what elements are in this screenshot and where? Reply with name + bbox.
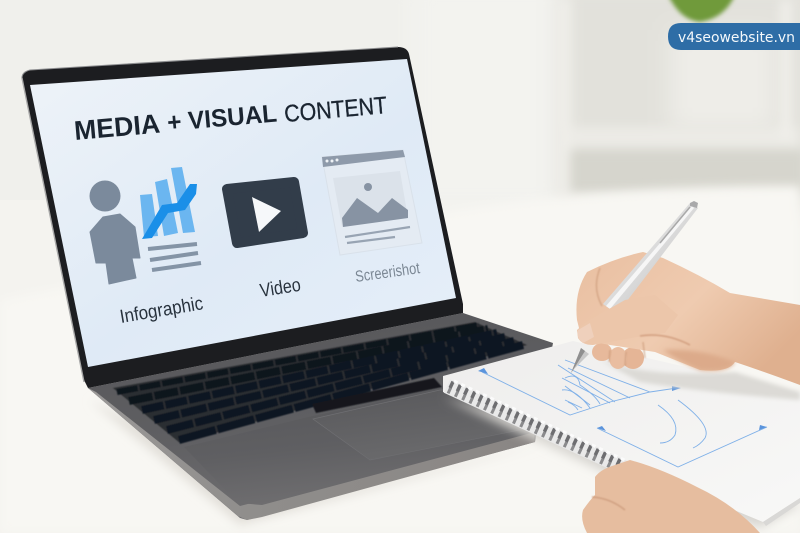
white table	[0, 186, 800, 533]
finger shadows	[596, 268, 645, 366]
badge: website name	[668, 23, 800, 50]
laptop	[22, 47, 560, 525]
lid silver edge	[22, 47, 398, 78]
blue sketch on paper	[478, 360, 767, 467]
paper	[443, 341, 800, 522]
plant	[668, 0, 735, 22]
laptop base	[88, 313, 553, 520]
thumbnail	[578, 323, 594, 343]
icon: infographic person and chart	[90, 167, 201, 284]
icon: screenshot window	[322, 150, 422, 255]
finger: middle	[609, 347, 627, 369]
title: CONTENT	[283, 92, 388, 128]
icon: video player	[227, 182, 303, 243]
finger: ring	[622, 347, 644, 369]
thumb	[577, 295, 678, 345]
hand palm	[576, 252, 800, 385]
label: Video: Video	[258, 275, 302, 302]
notebook	[443, 341, 800, 528]
front edge	[88, 388, 535, 520]
writing hand	[571, 201, 800, 400]
spiral binding	[447, 381, 631, 472]
badge: website name: v4seowebsite.vn	[678, 30, 795, 46]
lower hand	[582, 460, 760, 533]
notebook shadow	[443, 397, 800, 528]
palm rest	[184, 378, 540, 505]
hand shadow on paper	[600, 360, 800, 400]
title: + VISUAL	[166, 99, 278, 137]
keyboard	[113, 322, 527, 443]
laptop shadow	[90, 400, 560, 525]
finger crease	[592, 497, 625, 510]
laptop lid	[22, 47, 463, 388]
title: MEDIA	[73, 109, 161, 146]
title	[73, 92, 388, 146]
label: Screenshot: Screerishot	[354, 260, 421, 286]
label: Infographic: Infographic	[118, 293, 205, 328]
hand crease shadow	[640, 335, 690, 345]
screen	[30, 59, 456, 367]
spacebar	[312, 378, 442, 413]
trackpad	[313, 385, 535, 460]
finger: index tip	[592, 343, 612, 361]
pen	[571, 201, 698, 373]
